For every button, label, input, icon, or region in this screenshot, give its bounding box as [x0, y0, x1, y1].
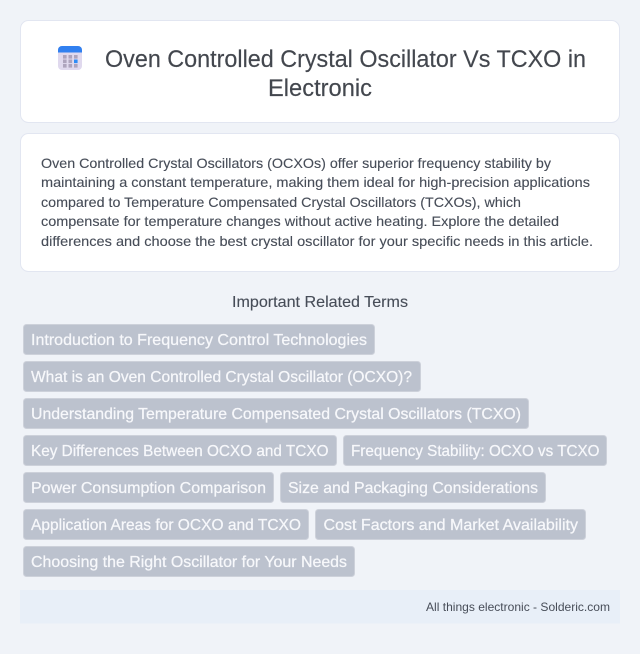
panel: description card — [20, 134, 620, 272]
heading: important related terms: Important Related Terms — [232, 294, 408, 311]
chip: application areas: Application Areas for OCXO and TCXO — [31, 517, 301, 534]
chip: cost factors — [316, 510, 586, 540]
chip: power consumption: Power Consumption Comparison — [31, 480, 266, 497]
icon: calendar — [58, 46, 82, 70]
description text: maintaining a constant temperature, making them ideal for high-precision applications — [41, 174, 590, 190]
description text: compensate for temperature changes without active heating. Explore the detailed — [41, 213, 559, 229]
chip: introduction: Introduction to Frequency Control Technologies — [31, 332, 367, 349]
chip: size and packaging — [280, 472, 546, 502]
chip: choosing oscillator: Choosing the Right Oscillator for Your Needs — [31, 554, 347, 571]
footer bar — [20, 590, 620, 624]
chip: frequency stability: Frequency Stability: OCXO vs TCXO — [351, 443, 600, 460]
chip: what is OCXO — [24, 362, 420, 392]
chip: application areas — [24, 510, 308, 540]
description text: differences and choose the best crystal oscillator for your specific needs in this article. — [41, 233, 593, 249]
chip: frequency stability — [344, 436, 606, 466]
chip: choosing oscillator — [24, 546, 354, 576]
panel: related term chips — [24, 324, 606, 576]
chip: key differences — [24, 436, 336, 466]
description text: compared to Temperature Compensated Crystal Oscillators (TCXOs), which — [41, 194, 521, 210]
title: Electronic — [268, 75, 372, 102]
description text: Oven Controlled Crystal Oscillators (OCXOs) offer superior frequency stability by — [41, 155, 551, 171]
chip: power consumption — [24, 472, 274, 502]
chip: size and packaging: Size and Packaging Considerations — [288, 480, 538, 497]
chip: introduction — [24, 324, 374, 354]
chip: key differences: Key Differences Between OCXO and TCXO — [31, 443, 328, 460]
chip: cost factors: Cost Factors and Market Availability — [324, 517, 578, 534]
panel: title card — [20, 20, 620, 122]
chip: what is OCXO: What is an Oven Controlled Crystal Oscillator (OCXO)? — [31, 369, 412, 386]
title: Oven Controlled Crystal Oscillator Vs TCXO in — [105, 46, 586, 73]
title — [105, 46, 586, 102]
chip: understanding TCXO: Understanding Temperature Compensated Crystal Oscillators (TCXO) — [31, 406, 521, 423]
footer bar: All things electronic - Solderic.com — [426, 600, 610, 614]
description text — [41, 155, 593, 249]
chip: understanding TCXO — [24, 398, 528, 428]
